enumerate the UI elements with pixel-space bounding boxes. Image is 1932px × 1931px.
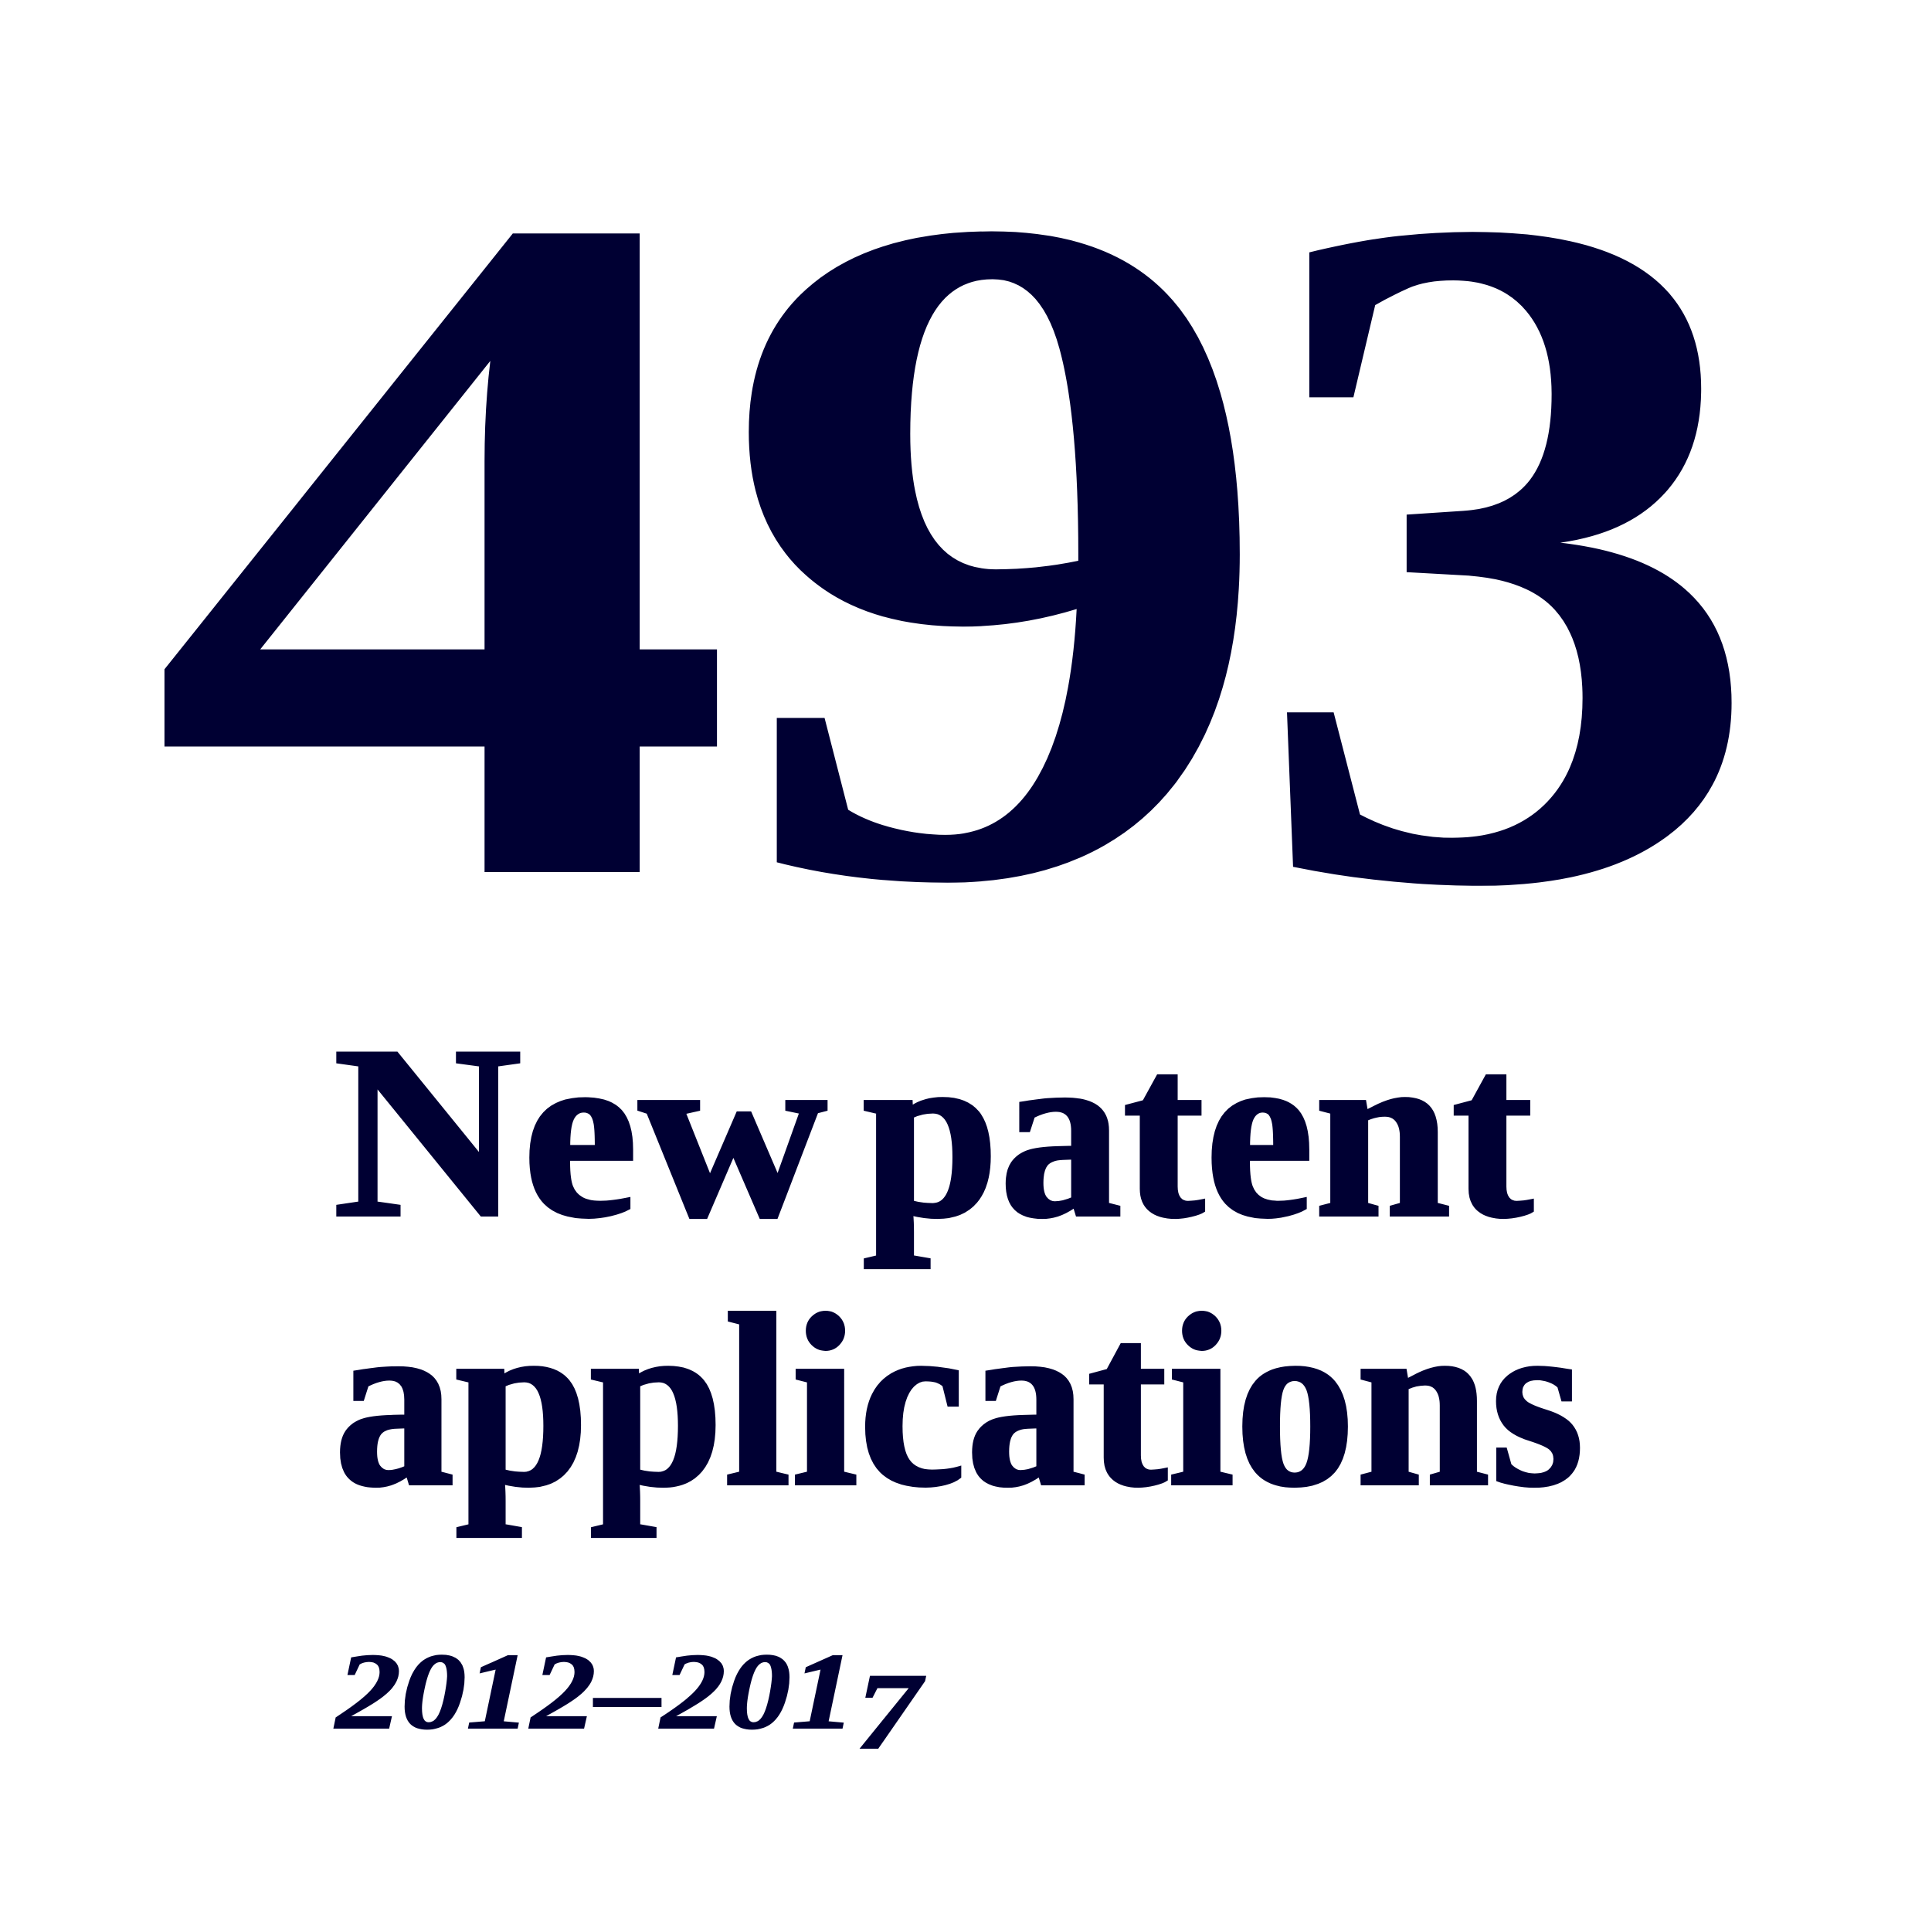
big number: 493: 4: [148, 8, 739, 1082]
big number: 493: 3: [1248, 9, 1767, 1087]
big number: 493: [148, 8, 1767, 1087]
heading: New patent applications: New: [333, 996, 827, 1269]
heading: New patent applications: patent: [862, 996, 1536, 1269]
heading: New patent applications: [333, 996, 1584, 1538]
heading: New patent applications: applications: [334, 1264, 1584, 1538]
big number: 493: 9: [718, 10, 1281, 1084]
date range: 2012–2017: 7: [856, 1651, 926, 1772]
date range: 2012–2017: 2012–201: [336, 1631, 772, 1752]
